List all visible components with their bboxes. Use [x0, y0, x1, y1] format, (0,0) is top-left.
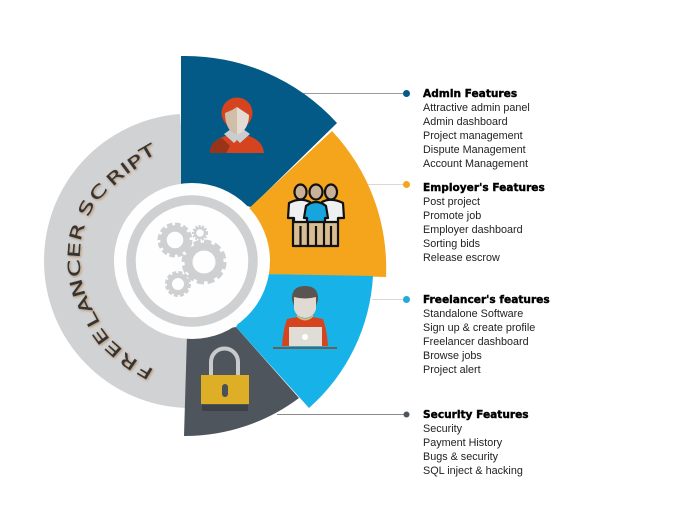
curved title: R — [102, 164, 128, 190]
text block: employer features: Post project — [423, 196, 480, 208]
text block: freelancer features: Freelancer dashboard — [423, 336, 529, 348]
text block: admin features: Attractive admin panel — [423, 102, 530, 114]
text block: security features: Security — [423, 423, 462, 435]
segment: freelancer — [236, 274, 373, 408]
curved title — [64, 139, 159, 384]
text block: admin features: Admin Features — [423, 88, 517, 100]
text block: freelancer features: Freelancer's features — [423, 294, 550, 306]
text block: admin features: Account Management — [423, 158, 528, 170]
connector lines — [277, 94, 406, 414]
centre disc — [114, 183, 270, 339]
curved title: R — [65, 221, 89, 243]
dot: security — [404, 412, 410, 418]
text block: security features: SQL inject & hacking — [423, 465, 523, 477]
text block: security features: Security Features — [423, 409, 529, 421]
text block: admin features — [422, 88, 530, 170]
segment: employer — [245, 131, 386, 277]
text block: admin features: Dispute Management — [423, 144, 526, 156]
dot: freelancer — [403, 296, 410, 303]
curved title: P — [123, 149, 147, 174]
text block: freelancer features: Browse jobs — [423, 350, 482, 362]
icon: freelancer at laptop — [273, 286, 337, 349]
text block: freelancer features: Project alert — [423, 364, 481, 376]
text block: security features — [423, 409, 529, 477]
icon: admin person — [210, 98, 264, 153]
icon: padlock — [201, 349, 249, 411]
text block: employer features: Employer dashboard — [423, 224, 523, 236]
icon: gears — [160, 224, 224, 296]
icon: employer group — [288, 184, 344, 246]
curved title: E — [101, 337, 126, 362]
curved title: L — [80, 309, 104, 331]
curved title: C — [64, 259, 85, 278]
segment: admin — [181, 56, 337, 207]
curved title: F — [134, 360, 156, 384]
text block: freelancer features: Standalone Software — [423, 308, 523, 320]
segment: security — [184, 327, 299, 436]
dot: admin — [403, 90, 410, 97]
curved title: S — [74, 196, 98, 219]
text block: security features: Bugs & security — [423, 451, 498, 463]
text block: freelancer features — [423, 294, 550, 376]
grey ring: freelancer script — [44, 114, 192, 408]
curved title: R — [116, 349, 141, 375]
curved title: C — [85, 179, 111, 205]
text block: security features: Payment History — [423, 437, 502, 449]
text block: employer features: Release escrow — [423, 252, 500, 264]
dot: employer — [403, 181, 410, 188]
curved title: T — [135, 139, 159, 165]
curved title: I — [117, 158, 134, 178]
text block: employer features — [423, 182, 545, 264]
text block: admin features: Admin dashboard — [423, 116, 508, 128]
curved title: E — [88, 325, 113, 349]
text block: employer features: Promote job — [423, 210, 481, 222]
curved title: A — [71, 293, 97, 317]
text block: admin features: Project management — [423, 130, 523, 142]
curved title: E — [64, 242, 84, 258]
curved title: N — [66, 277, 89, 300]
text block: employer features: Sorting bids — [423, 238, 480, 250]
text block: employer features: Employer's Features — [423, 182, 545, 194]
text block: freelancer features: Sign up & create profile — [423, 322, 535, 334]
